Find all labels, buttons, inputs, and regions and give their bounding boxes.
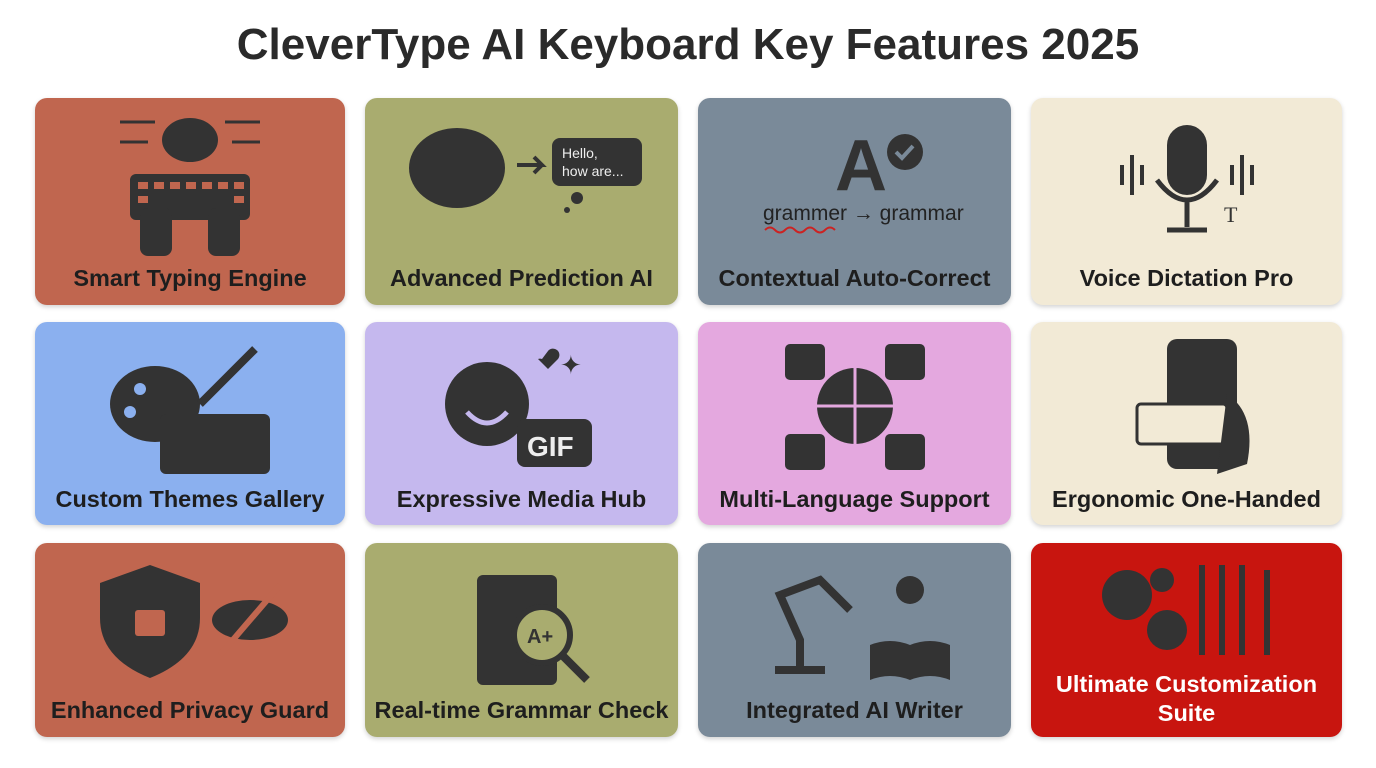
panel: smart typing engine — [35, 98, 345, 305]
icon: shield lock eye — [100, 565, 288, 678]
icon: document magnifier — [477, 575, 590, 685]
label: Voice Dictation Pro — [1080, 265, 1293, 291]
label: Ergonomic One-Handed — [1052, 486, 1321, 512]
title: CleverType AI Keyboard Key Features 2025 — [237, 20, 1139, 69]
icon: palette keyboard — [110, 346, 270, 474]
label: Multi-Language Support — [719, 486, 990, 512]
label: Smart Typing Engine — [73, 265, 307, 291]
label: Ultimate Customization — [1056, 671, 1317, 697]
panel: real-time grammar — [365, 543, 678, 737]
panel: ultimate customization — [1031, 543, 1342, 737]
label: Real-time Grammar Check — [375, 697, 668, 723]
panel: advanced prediction — [365, 98, 678, 305]
icon: brain to speech: how are... — [562, 163, 623, 179]
icon: document magnifier: A+ — [526, 626, 553, 648]
panel: privacy — [35, 543, 345, 737]
icon: smiley GIF: ✦ — [560, 350, 581, 380]
icon: A check grammar: grammer → grammar — [762, 202, 963, 225]
label: Advanced Prediction AI — [390, 265, 653, 291]
icon: brain keyboard hands — [120, 118, 260, 256]
label: Custom Themes Gallery — [55, 486, 325, 512]
icon: phone hand — [1136, 339, 1250, 474]
label — [1056, 671, 1317, 726]
icon: smiley GIF: GIF — [526, 431, 573, 462]
label: Expressive Media Hub — [397, 486, 646, 512]
icon: brain to speech: Hello, — [562, 145, 597, 161]
icon: robot arm book — [774, 576, 950, 680]
panel: custom themes — [35, 322, 345, 525]
panel: AI writer — [698, 543, 1011, 737]
icon: smiley GIF — [445, 348, 592, 467]
panel: ergonomic — [1031, 322, 1342, 525]
icon: microphone — [1120, 125, 1254, 232]
icon: gears sliders wrench — [1102, 565, 1270, 655]
icon: brain to speech — [409, 128, 642, 213]
panel: voice dictation — [1031, 98, 1342, 305]
icon: A check grammar: A — [834, 126, 886, 206]
label: Enhanced Privacy Guard — [51, 697, 329, 723]
icon: A check grammar — [762, 126, 964, 234]
panel: multi-language — [698, 322, 1011, 525]
label: Integrated AI Writer — [746, 697, 963, 723]
panel: contextual auto-correct — [698, 98, 1011, 305]
label: Suite — [1158, 700, 1215, 726]
panel: expressive media — [365, 322, 678, 525]
label: Contextual Auto-Correct — [718, 265, 990, 291]
icon: globe languages — [785, 344, 925, 470]
icon: microphone: T — [1224, 202, 1238, 227]
